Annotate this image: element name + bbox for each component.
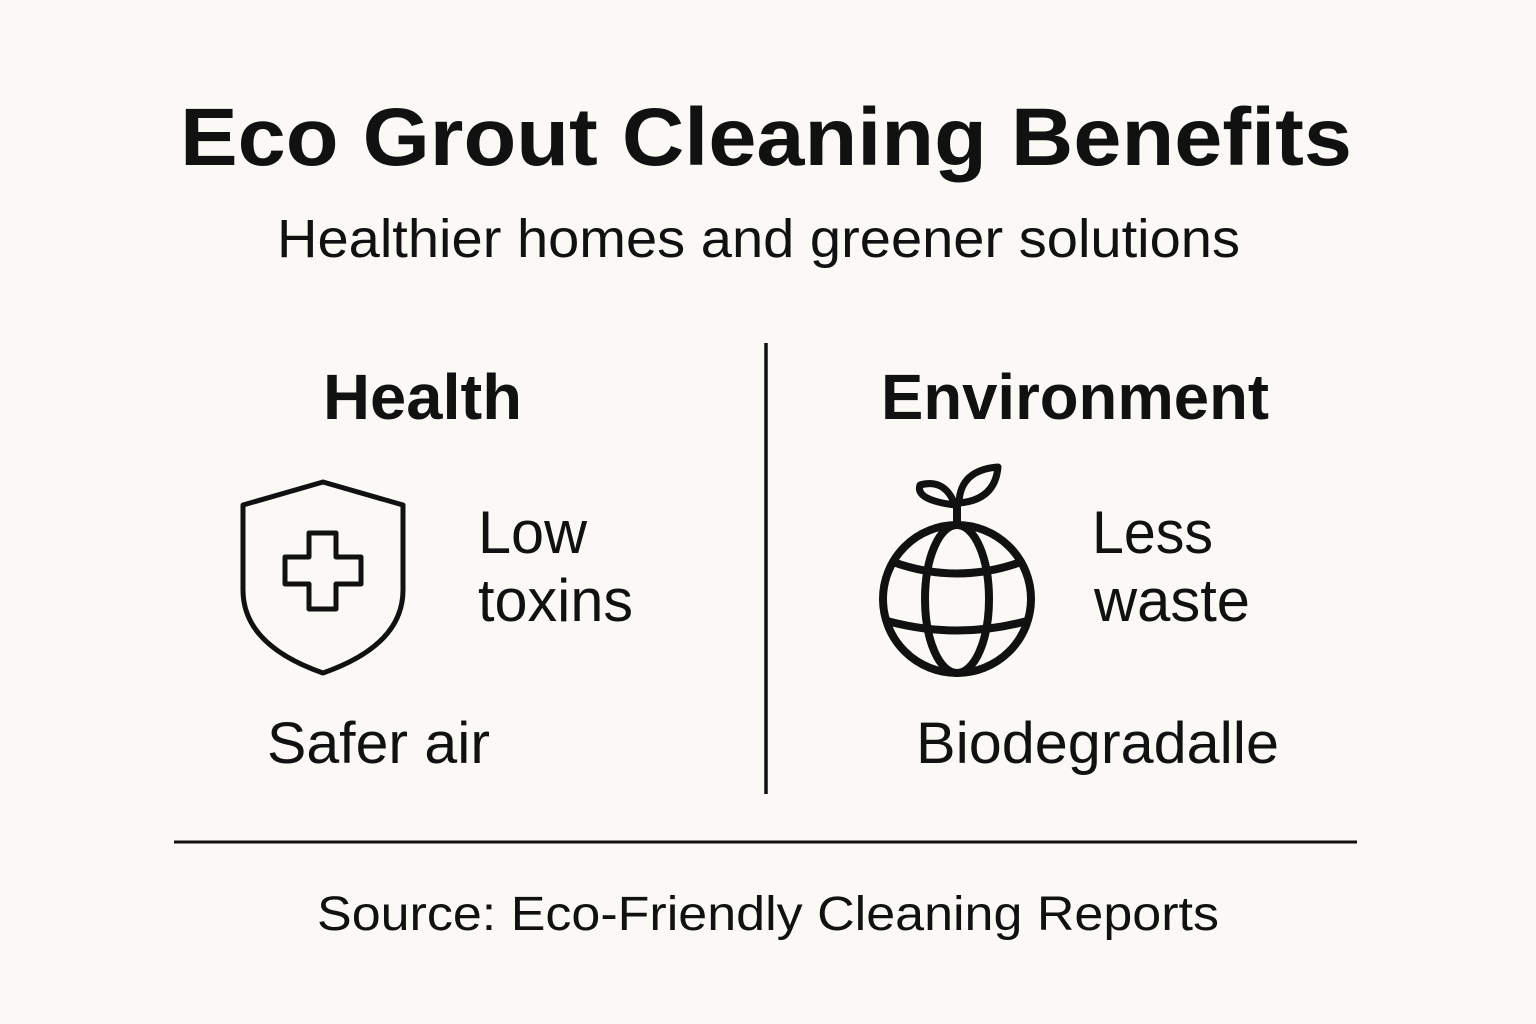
text: less waste: Less [1092, 499, 1213, 566]
heading: environment: Environment [881, 361, 1269, 433]
panel: environment [881, 361, 1279, 776]
divider horizontal [174, 840, 1357, 844]
text: low toxins: toxins [478, 567, 633, 634]
text: low toxins: Low [478, 499, 588, 566]
text: low toxins [478, 499, 633, 634]
panel: health [243, 361, 633, 776]
divider vertical [764, 343, 768, 794]
heading: health: Health [323, 361, 522, 433]
text: less waste: waste [1093, 567, 1250, 634]
subtitle: Healthier homes and greener solutions [277, 209, 1240, 269]
text: less waste [1092, 499, 1250, 634]
text: safer air: Safer air [267, 711, 490, 776]
source note: Source: Eco-Friendly Cleaning Reports [317, 888, 1219, 941]
title: Eco Grout Cleaning Benefits [180, 92, 1352, 183]
icon: shield with cross [243, 482, 403, 673]
text: biodegradable: Biodegradalle [916, 711, 1279, 776]
icon: globe with leaves [883, 467, 1031, 673]
